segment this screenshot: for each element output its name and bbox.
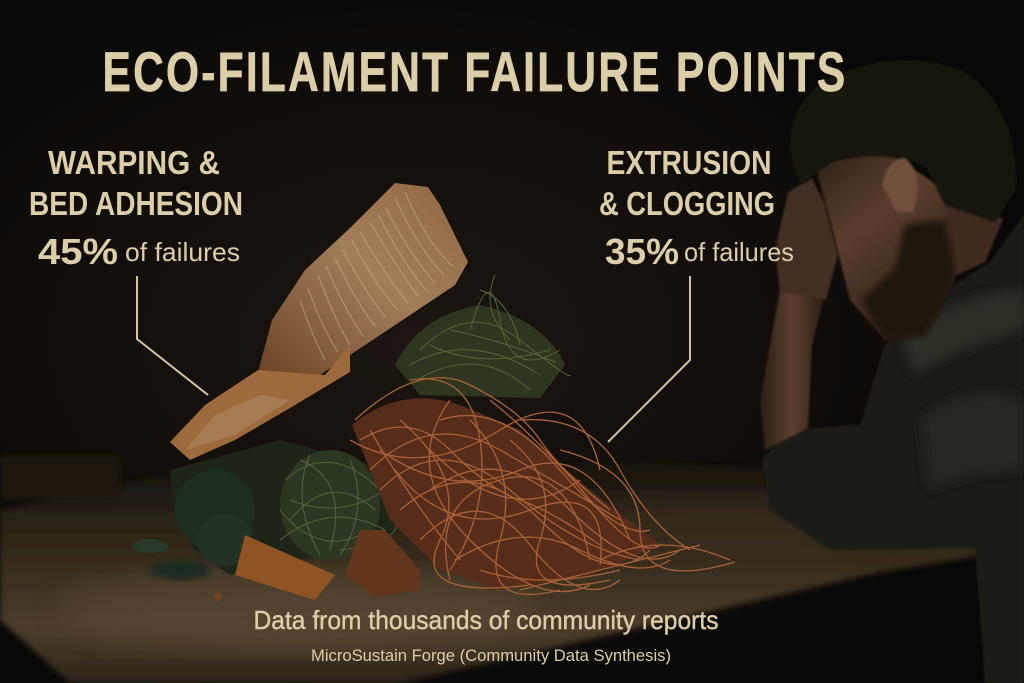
callout: warping: 45% <box>38 231 118 272</box>
callout: extrusion <box>599 144 794 272</box>
shirt <box>762 215 1024 683</box>
wood chunks <box>235 535 335 600</box>
callout: warping: of failures <box>125 237 240 267</box>
hand <box>775 178 838 300</box>
wood base <box>170 345 350 460</box>
neck <box>925 170 1003 290</box>
ear <box>882 158 918 212</box>
callout: extrusion: of failures <box>684 237 794 267</box>
forearm <box>760 290 826 450</box>
arrow: extrusion leader line <box>608 276 690 442</box>
arrow: warping leader line <box>137 276 208 395</box>
source: MicroSustain Forge (Community Data Synthesis) <box>311 646 671 665</box>
person <box>760 60 1024 683</box>
callout: warping: BED ADHESION <box>29 185 243 222</box>
callout: extrusion: & CLOGGING <box>599 185 775 222</box>
workbench table <box>0 455 985 683</box>
copper tangle <box>352 398 660 590</box>
callout: extrusion: 35% <box>605 231 679 272</box>
green filament front <box>170 440 400 575</box>
wood slab <box>258 183 468 378</box>
callout: warping <box>29 144 243 272</box>
face <box>815 150 955 340</box>
callout: extrusion: EXTRUSION <box>606 144 772 181</box>
callout: warping: WARPING & <box>48 144 220 181</box>
green filament back <box>395 305 565 398</box>
hair <box>790 60 1016 222</box>
data note: Data from thousands of community reports <box>254 605 718 635</box>
filament pile <box>132 183 735 601</box>
